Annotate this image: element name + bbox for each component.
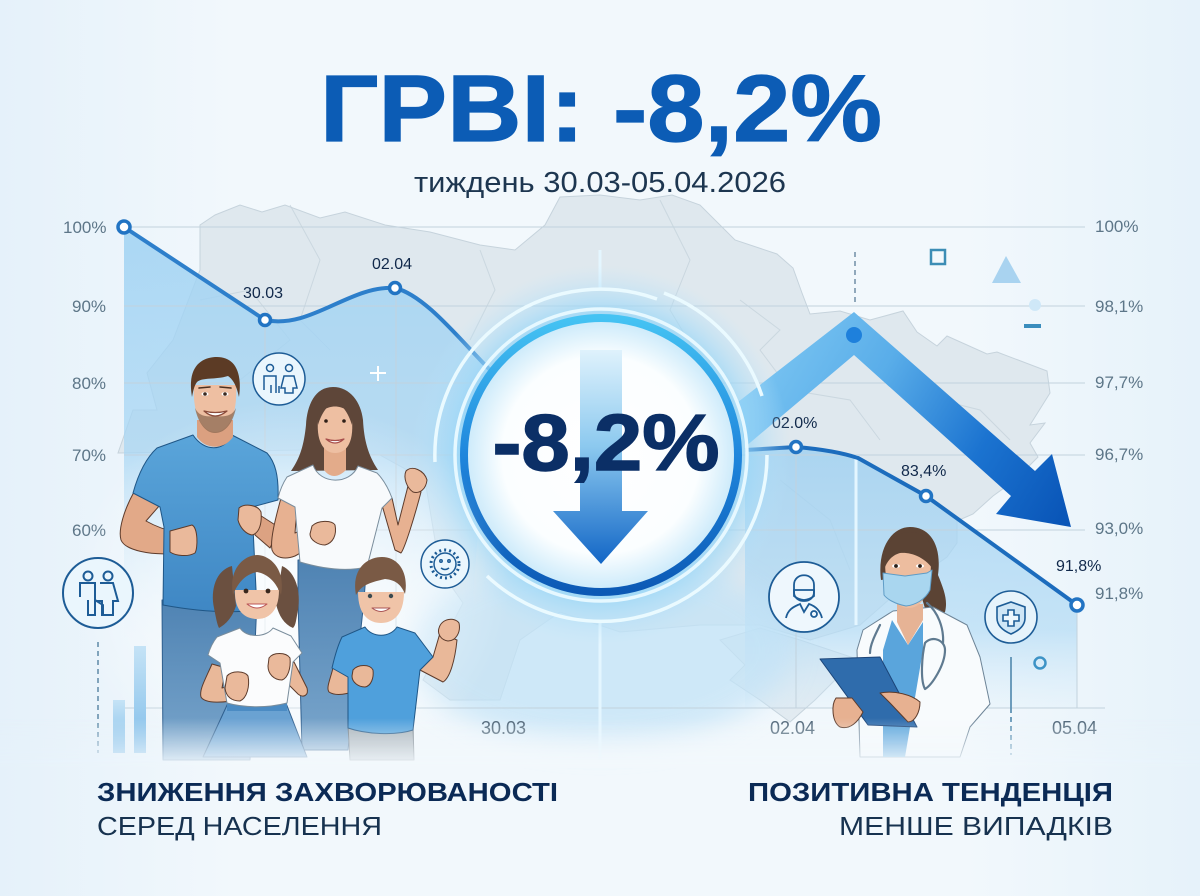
big down arrow shape (738, 312, 1071, 527)
map of Ukraine (118, 195, 1050, 722)
left axis labels: 90% (72, 297, 106, 316)
data labels (243, 256, 1101, 575)
illustration: family (120, 357, 459, 760)
left axis labels: 60% (72, 521, 106, 540)
right axis labels (1095, 217, 1143, 603)
right axis labels: 100% (1095, 217, 1138, 236)
left axis labels: 70% (72, 446, 106, 465)
down arrow (553, 350, 648, 564)
data labels: 30.03 (243, 285, 283, 302)
dashed line below shield (1010, 657, 1012, 755)
data labels: 02.04 (372, 256, 412, 273)
plus sign (370, 366, 386, 381)
caption left: ЗНИЖЕННЯ ЗАХВОРЮВАНОСТІ (97, 777, 558, 807)
date axis labels: 05.04 (1052, 718, 1097, 738)
title: ГРВІ: -8,2% (320, 56, 882, 162)
date axis labels (481, 718, 1097, 738)
trend line right (745, 447, 1077, 605)
girl (201, 555, 307, 757)
date axis labels: 30.03 (481, 718, 526, 738)
lower centre glow (410, 555, 790, 745)
data labels: 91,8% (1056, 558, 1101, 575)
data labels: 02.0% (772, 415, 817, 432)
right axis labels: 91,8% (1095, 584, 1143, 603)
chart: left area fill (124, 227, 490, 640)
caption left (97, 777, 558, 841)
trend line left (124, 227, 490, 370)
central badge (411, 265, 791, 645)
left axis labels: 100% (63, 218, 106, 237)
badge value: -8,2% (492, 398, 720, 487)
caption right (748, 777, 1113, 841)
chart grid lines (124, 227, 1105, 708)
icon: shield (985, 591, 1037, 643)
white glow behind family (70, 400, 510, 780)
mother (272, 387, 427, 750)
right axis labels: 96,7% (1095, 445, 1143, 464)
left axis labels: 80% (72, 374, 106, 393)
date axis labels: 02.04 (770, 718, 815, 738)
data points (118, 221, 1083, 611)
icon: family large (63, 558, 133, 628)
bottom fade (97, 720, 1096, 760)
right axis labels: 93,0% (1095, 519, 1143, 538)
boy (328, 557, 459, 760)
left axis labels (63, 218, 106, 540)
icon: doctor (769, 562, 839, 632)
chart: right area fill (745, 447, 1077, 708)
decorative shapes top right (855, 250, 1041, 328)
small ring (1034, 658, 1046, 668)
right axis labels: 98,1% (1095, 297, 1143, 316)
icon: virus (421, 540, 469, 588)
father (120, 357, 280, 760)
data labels: 83,4% (901, 463, 946, 480)
caption left: СЕРЕД НАСЕЛЕННЯ (97, 811, 382, 841)
right axis labels: 97,7% (1095, 373, 1143, 392)
illustration: doctor (820, 527, 990, 757)
icon: family small (253, 353, 305, 405)
caption right: МЕНШЕ ВИПАДКІВ (839, 811, 1113, 841)
arrow dot (846, 327, 862, 343)
subtitle: тиждень 30.03-05.04.2026 (414, 167, 786, 199)
caption right: ПОЗИТИВНА ТЕНДЕНЦІЯ (748, 777, 1113, 807)
outer arcs (435, 289, 767, 621)
bars (98, 642, 146, 753)
clipboard (820, 657, 917, 727)
glow lines (600, 250, 856, 760)
